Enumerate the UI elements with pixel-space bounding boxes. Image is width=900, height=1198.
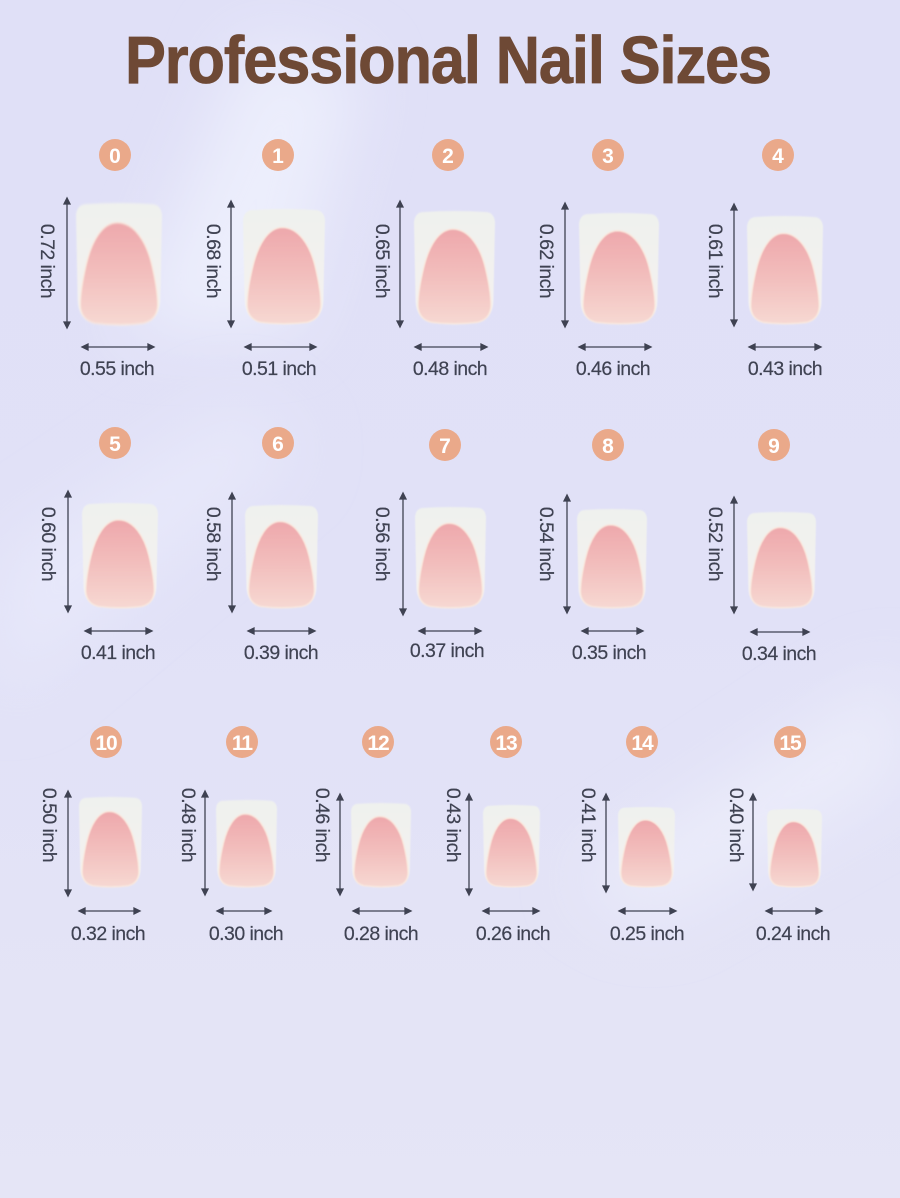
nail size 2 [371, 139, 495, 380]
nail size 9: 9 [768, 435, 780, 458]
nail size 14: 0.25 inch [610, 923, 684, 945]
nail size 11: 0.48 inch [177, 788, 199, 862]
nail size 14: 0.41 inch [577, 788, 599, 862]
nail size 7: 0.56 inch [371, 507, 393, 581]
nail size 9 [704, 429, 816, 665]
nail size 3: 0.62 inch [535, 224, 557, 298]
nail size 5: 0.41 inch [81, 642, 155, 664]
nail size 1 [202, 139, 325, 380]
nail size 10: 0.32 inch [71, 923, 145, 945]
nail size 3: 3 [602, 145, 614, 168]
nail size 1: 1 [272, 145, 284, 168]
nail size 6: 0.58 inch [202, 507, 224, 581]
nail size 6: 6 [272, 433, 284, 456]
nail size 8: 0.35 inch [572, 642, 646, 664]
nail size 4: 0.61 inch [704, 224, 726, 298]
nail size 6: 0.39 inch [244, 642, 318, 664]
nail size 0 [36, 139, 162, 380]
nail size 3 [535, 139, 659, 380]
nail size 5 [37, 427, 158, 664]
nail size 7 [371, 429, 486, 662]
nail size 13: 13 [495, 732, 517, 755]
nail size 15: 0.40 inch [725, 788, 747, 862]
nail size 11 [177, 726, 283, 945]
nail size 11: 0.30 inch [209, 923, 283, 945]
nail size 12 [311, 726, 418, 945]
nail size 11: 11 [232, 732, 253, 755]
nail size 1: 0.51 inch [242, 358, 316, 380]
nail size 12: 0.28 inch [344, 923, 418, 945]
nail size 0: 0.55 inch [80, 358, 154, 380]
nail size 13 [442, 726, 550, 945]
nail size 14: 14 [631, 732, 654, 755]
nail size 15: 15 [779, 732, 802, 755]
nail size 2: 2 [442, 145, 454, 168]
nail size 10: 0.50 inch [38, 788, 60, 862]
nail size 5: 5 [109, 433, 121, 456]
nail size 8 [535, 429, 647, 664]
nail size 5: 0.60 inch [37, 507, 59, 581]
nail size 0: 0.72 inch [36, 224, 58, 298]
nail size 6 [202, 427, 318, 664]
nail size 9: 0.52 inch [704, 507, 726, 581]
nail size 13: 0.43 inch [442, 788, 464, 862]
nail size 1: 0.68 inch [202, 224, 224, 298]
nail size 9: 0.34 inch [742, 643, 816, 665]
nail size 10: 10 [95, 732, 117, 755]
nail size 7: 0.37 inch [410, 640, 484, 662]
nail size 13: 0.26 inch [476, 923, 550, 945]
nail size 2: 0.65 inch [371, 224, 393, 298]
title: Professional Nail Sizes [125, 23, 771, 98]
nail size 2: 0.48 inch [413, 358, 487, 380]
nail size 15 [725, 726, 830, 945]
nail size 4: 0.43 inch [748, 358, 822, 380]
nail size 3: 0.46 inch [576, 358, 650, 380]
nail size 8: 0.54 inch [535, 507, 557, 581]
nail size 8: 8 [602, 435, 614, 458]
nail size 4 [704, 139, 823, 380]
nail size 12: 12 [367, 732, 389, 755]
nail size 7: 7 [439, 435, 451, 458]
nail size 4: 4 [772, 145, 784, 168]
nail size 12: 0.46 inch [311, 788, 333, 862]
nail size 10 [38, 726, 145, 945]
nail size 0: 0 [109, 145, 121, 168]
nail size 14 [577, 726, 684, 945]
nail size 15: 0.24 inch [756, 923, 830, 945]
